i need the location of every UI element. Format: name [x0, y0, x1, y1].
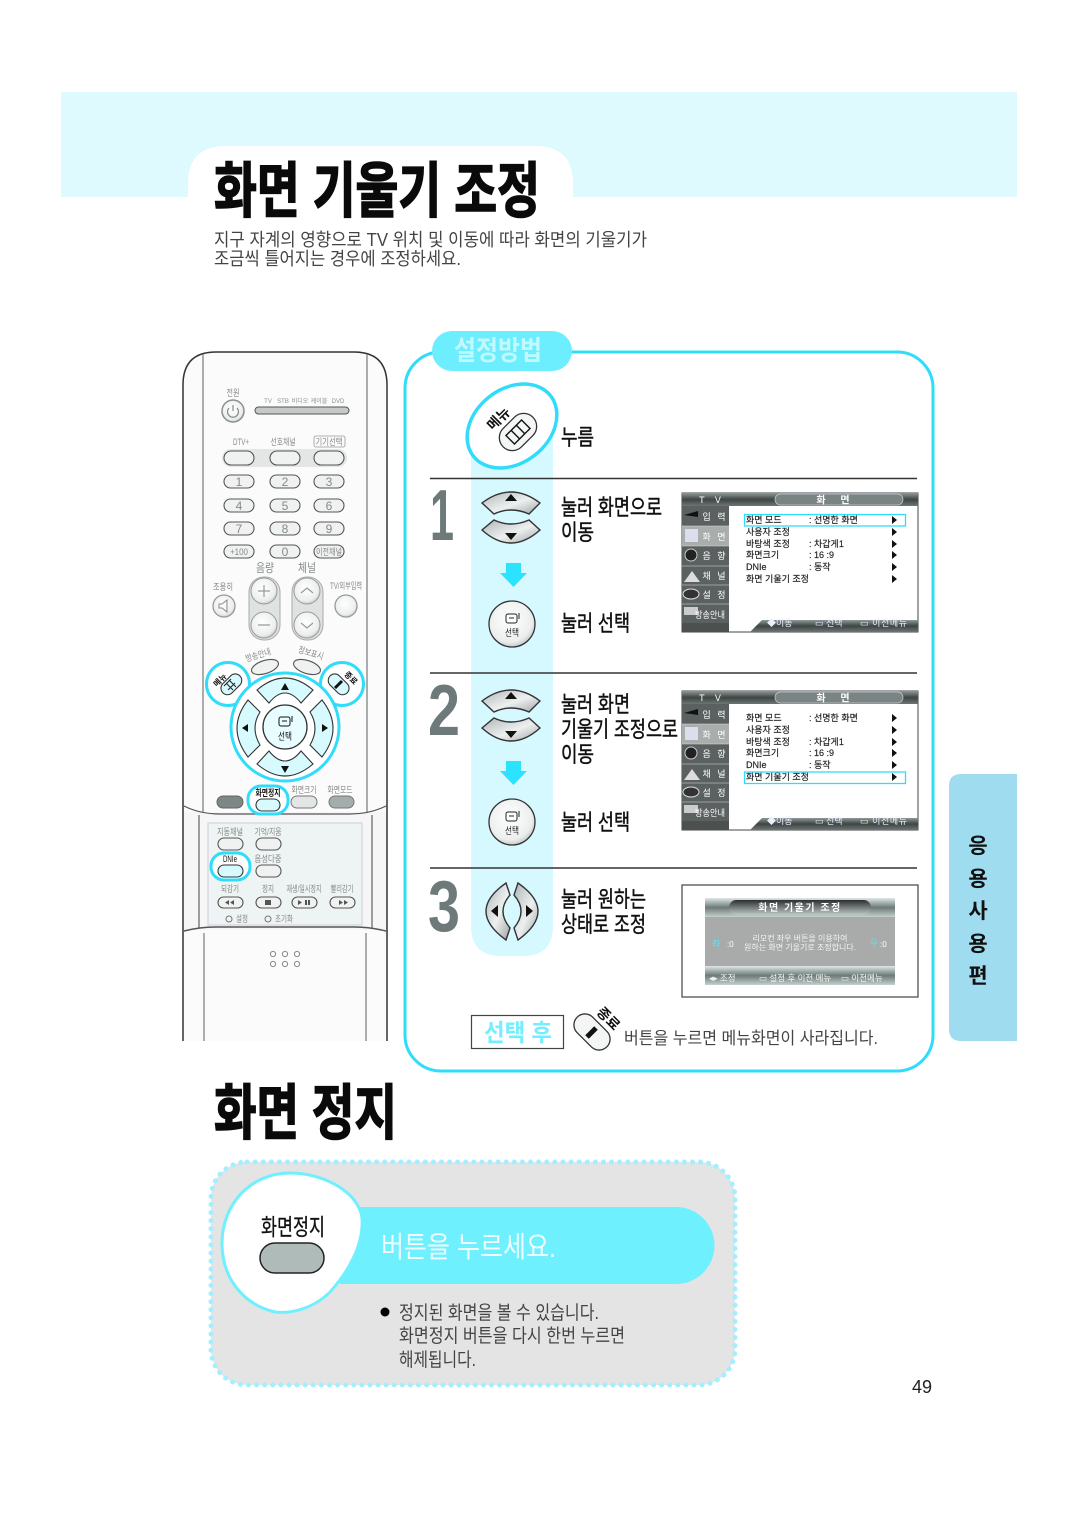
step 3 tilt adjustment screen: :0 [880, 940, 887, 949]
volume, channel and mute buttons: 체널 [298, 561, 316, 575]
step 1 TV menu screen: T V [699, 495, 725, 505]
step 2 TV menu screen [682, 691, 918, 830]
step 2 instructions: 이동 [561, 742, 594, 767]
flap buttons [211, 826, 355, 924]
menu items: 사용자 조정 [746, 527, 790, 537]
menu footer: ▭ 선택 [815, 816, 843, 826]
freeze description: 화면정지 버튼을 다시 한번 누르면 [399, 1325, 625, 1347]
step 2 arrow [500, 761, 527, 785]
menu items [744, 713, 906, 784]
speaker holes [270, 951, 300, 967]
power button and device labels: 케이블 [311, 397, 328, 405]
highlighted directional pad [231, 673, 339, 781]
menu items [744, 514, 906, 584]
volume, channel and mute buttons [213, 561, 362, 640]
after selection box [472, 1016, 564, 1048]
power button and device labels [222, 388, 349, 422]
step 3 left and right buttons [486, 883, 538, 940]
menu sidebar: 설 정 [702, 590, 728, 600]
power button and device labels: TV [264, 399, 272, 405]
number buttons: 3 [326, 475, 333, 489]
press button banner [340, 1207, 714, 1284]
side tab: advanced use [949, 774, 1017, 1041]
step 3 tilt adjustment screen: 우 [870, 938, 878, 948]
panel: setup method [405, 352, 933, 1071]
menu footer: ◆이동 [767, 816, 793, 826]
title tab [188, 146, 573, 197]
step 2 select button: 선택 [505, 826, 519, 837]
menu items: : 차갑게1 [809, 736, 844, 747]
step 2 number: 2 [428, 671, 460, 751]
menu button icon [451, 367, 573, 485]
top button row: 기기선택 [316, 437, 342, 447]
step 2 instructions: 눌러 화면 [561, 692, 630, 717]
step 3 tilt adjustment screen: 화면 기울기 조정 [758, 901, 842, 914]
power button and device labels: DVD [332, 399, 345, 405]
side tab: advanced use: 사 [968, 900, 988, 923]
volume, channel and mute buttons: TV/외부입력 [330, 580, 362, 591]
number buttons [224, 475, 344, 559]
menu items: 화면크기 [746, 748, 779, 758]
highlighted exit button [320, 662, 364, 706]
menu footer: ▭ 이전메뉴 [860, 618, 907, 628]
menu items: 바탕색 조정 [746, 539, 790, 549]
menu items: : 선명한 화면 [809, 515, 858, 525]
number buttons: 8 [282, 522, 289, 536]
menu items: 화면 모드 [746, 515, 782, 525]
step 2 instructions [561, 692, 678, 835]
flap buttons: 지동채널 [217, 827, 243, 837]
step 1 select button: 선택 [505, 628, 519, 639]
power button and device labels: STB [277, 399, 289, 405]
menu items: 바탕색 조정 [746, 737, 790, 747]
menu items: DNIe [746, 562, 767, 572]
still, size and mode buttons: 화면모드 [328, 785, 352, 795]
side tab: advanced use: 응 [968, 835, 988, 858]
menu sidebar: 화 면 [702, 532, 728, 542]
menu items: DNIe [746, 760, 767, 770]
step 2 instructions: 눌러 선택 [561, 810, 630, 835]
menu items: : 선명한 화면 [809, 713, 858, 723]
exit button icon [569, 1004, 623, 1055]
flap buttons: 재생/일시정지 [286, 884, 322, 894]
freeze description [380, 1302, 625, 1371]
step 3 tilt adjustment screen: ▭ 설정 후 이전 메뉴 [759, 973, 831, 983]
menu items: : 동작 [809, 760, 831, 770]
number buttons: 이전채널 [316, 547, 342, 557]
menu items: 사용자 조정 [746, 725, 790, 735]
press label: 누름 [561, 425, 594, 450]
highlighted directional pad: 선택 [278, 731, 292, 743]
menu sidebar: 화 면 [702, 730, 728, 740]
highlighted exit button: 종료 [342, 670, 360, 687]
menu items: 화면 기울기 조정 [746, 772, 809, 782]
flap buttons: 초기화 [275, 914, 293, 924]
number buttons: 4 [236, 499, 243, 513]
step 2 instructions: 기울기 조정으로 [561, 717, 678, 742]
number buttons: 1 [236, 475, 243, 489]
menu sidebar [682, 506, 729, 623]
flap buttons: DNIe [223, 854, 237, 864]
step 2 TV menu screen: 화 면 [816, 692, 856, 704]
flap buttons: 기억/지움 [254, 826, 282, 837]
freeze description: 정지된 화면을 볼 수 있습니다. [399, 1302, 599, 1324]
light blue step column [471, 420, 553, 956]
step 2 TV menu screen: T V [699, 693, 725, 703]
step 3 instructions [561, 887, 646, 937]
menu sidebar [682, 704, 729, 821]
top button row [222, 436, 347, 467]
menu items: : 차갑게1 [809, 538, 844, 549]
step 3 tilt adjustment screen: ▭ 이전메뉴 [841, 973, 883, 983]
step 1 up and down buttons [482, 492, 540, 543]
step 1 TV menu screen: 화 면 [816, 494, 856, 506]
step dividers [430, 478, 917, 868]
side tab: advanced use: 용 [968, 868, 988, 891]
title: screen tilt adjustment: 화면 기울기 조정 [214, 158, 540, 225]
menu items: 화면 모드 [746, 713, 782, 723]
menu items: 화면 기울기 조정 [746, 574, 809, 584]
step 3 instructions: 눌러 원하는 [561, 887, 646, 912]
freeze description: 해제됩니다. [399, 1349, 476, 1371]
top header band [61, 92, 1017, 197]
top button row: 선호채널 [270, 437, 296, 447]
menu sidebar: 음 향 [702, 748, 728, 759]
step 1 instructions: 이동 [561, 520, 594, 545]
menu items: 화면크기 [746, 550, 779, 560]
guide and info buttons [244, 645, 325, 678]
remote control [183, 352, 387, 1041]
step 3 tilt adjustment screen: :0 [727, 940, 734, 949]
step 3 instructions: 상태로 조정 [561, 912, 646, 937]
flap buttons: 빨리감기 [330, 883, 354, 894]
still, size and mode buttons: 화면정지 [256, 787, 280, 798]
step 3 tilt adjustment screen: 좌 [712, 939, 720, 949]
page number: 49 [912, 1377, 932, 1397]
step 1 number: 1 [430, 476, 454, 556]
menu footer: ◆이동 [767, 618, 793, 628]
top button row: DTV+ [233, 437, 249, 447]
step 3 tilt adjustment screen: 리모컨 좌우 버튼을 이용하여 [752, 933, 848, 943]
flap buttons: 음성다중 [254, 854, 282, 864]
setup method tab: 설정방법 [454, 336, 542, 366]
flap buttons: 설정 [236, 914, 248, 924]
number buttons: 0 [282, 545, 289, 559]
intro text: 지구 자계의 영향으로 TV 위치 및 이동에 따라 화면의 기울기가 [214, 230, 647, 250]
number buttons: +100 [230, 547, 248, 557]
step 1 select button [489, 601, 535, 647]
panel: screen freeze [211, 1162, 735, 1385]
menu footer [682, 816, 918, 830]
intro text [214, 230, 647, 269]
volume, channel and mute buttons: 조용히 [213, 582, 233, 592]
setup method tab [432, 331, 572, 371]
number buttons: 2 [282, 475, 289, 489]
freeze button callout: 화면정지 [261, 1214, 325, 1240]
menu sidebar: 음 향 [702, 550, 728, 561]
menu sidebar: 입 력 [702, 511, 728, 522]
freeze button callout [222, 1173, 362, 1312]
step 3 tilt adjustment screen: ◂▸ 조정 [709, 973, 736, 983]
menu items: : 동작 [809, 562, 831, 572]
number buttons: 7 [236, 522, 243, 536]
step 3 tilt adjustment screen: 원하는 화면 기울기로 조정합니다. [744, 942, 856, 952]
menu sidebar: 방송안내 [695, 610, 725, 620]
volume, channel and mute buttons: 음량 [256, 561, 274, 575]
menu items: : 16 :9 [809, 550, 834, 560]
still, size and mode buttons: 화면크기 [292, 785, 316, 795]
step 1 instructions: 눌러 화면으로 [561, 495, 662, 520]
step 2 up and down buttons [482, 690, 540, 741]
step 1 instructions [561, 495, 662, 636]
after selection box: 선택 후 [484, 1020, 552, 1047]
highlighted menu button [206, 662, 250, 706]
number buttons: 9 [326, 522, 333, 536]
step 1 instructions: 눌러 선택 [561, 611, 630, 636]
exit instruction: 버튼을 누르면 메뉴화면이 사라집니다. [624, 1029, 878, 1048]
power button and device labels: 전원 [226, 388, 240, 398]
guide and info buttons: 방송안내 [244, 647, 272, 664]
menu sidebar: 입 력 [702, 709, 728, 720]
intro text: 조금씩 틀어지는 경우에 조정하세요. [214, 249, 461, 269]
power button and device labels: 비디오 [292, 397, 309, 405]
menu footer [682, 618, 918, 632]
step 1 arrow [500, 563, 527, 587]
menu sidebar: 채 널 [702, 769, 728, 779]
step 3 tilt adjustment screen [682, 885, 918, 997]
menu button icon: 메뉴 [484, 404, 513, 433]
number buttons: 6 [326, 499, 333, 513]
guide and info buttons: 정보표시 [297, 645, 325, 662]
step 1 TV menu screen [682, 493, 918, 632]
exit button icon: 종료 [594, 1004, 623, 1033]
press button banner: 버튼을 누르세요. [381, 1232, 556, 1264]
side tab: advanced use: 용 [968, 933, 988, 956]
still, size and mode buttons [217, 785, 354, 814]
menu sidebar: 설 정 [702, 788, 728, 798]
title: screen freeze: 화면 정지 [214, 1080, 397, 1147]
step 3 number: 3 [428, 867, 460, 947]
side tab: advanced use: 편 [968, 965, 988, 988]
remote body [183, 352, 387, 1041]
flap buttons: 정지 [262, 884, 274, 894]
menu items: : 16 :9 [809, 748, 834, 758]
menu footer: ▭ 이전메뉴 [860, 816, 907, 826]
step 2 select button [489, 799, 535, 845]
number buttons: 5 [282, 499, 289, 513]
menu sidebar: 방송안내 [695, 808, 725, 818]
menu footer: ▭ 선택 [815, 618, 843, 628]
highlighted menu button: 메뉴 [211, 671, 229, 689]
flap buttons: 되감기 [221, 883, 239, 894]
menu sidebar: 채 널 [702, 571, 728, 581]
